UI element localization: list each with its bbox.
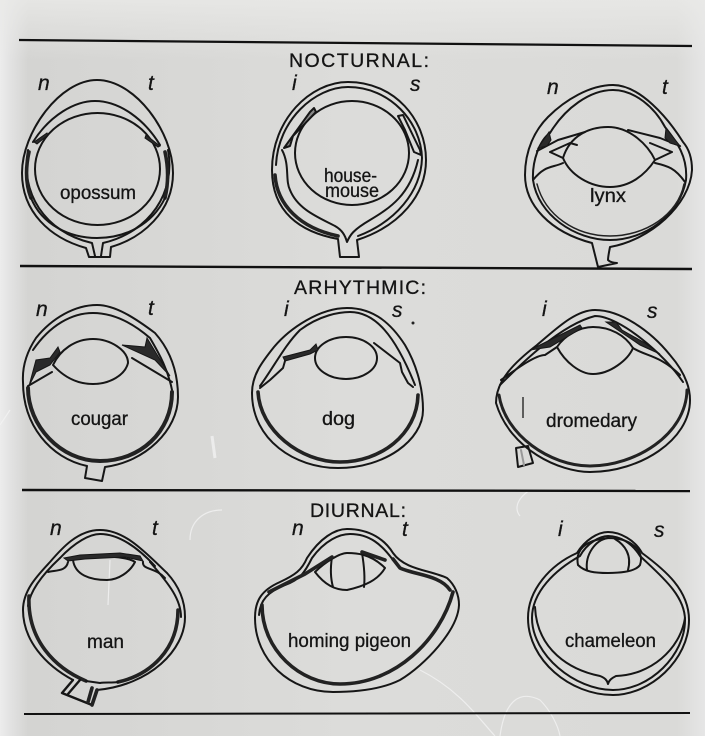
rule: nocturnal / arhythmic — [20, 266, 692, 269]
eye: opossum — [22, 72, 173, 257]
letter: n: n — [292, 517, 304, 540]
letter: i: i — [558, 518, 564, 541]
letter: n: n — [547, 76, 559, 99]
label: lynx: lynx — [590, 186, 627, 207]
heading: diurnal: DIURNAL: — [310, 500, 406, 522]
eye: man — [23, 517, 185, 705]
label: house-mouse: house- — [324, 166, 377, 187]
label: cougar: cougar — [71, 409, 129, 430]
eye: chameleon — [528, 518, 689, 695]
rule: top — [19, 40, 692, 46]
letter: s: s — [647, 300, 658, 323]
label: man: man — [87, 632, 124, 653]
rule: bottom — [24, 713, 690, 714]
letter: n: n — [36, 298, 48, 321]
heading: nocturnal: NOCTURNAL: — [289, 50, 429, 72]
letter: t: t — [148, 72, 155, 95]
letter: n: n — [38, 72, 50, 95]
letter: t: t — [662, 76, 669, 99]
label: dromedary: dromedary — [546, 411, 637, 432]
label: opossum: opossum — [60, 183, 136, 204]
eye: dromedary — [496, 298, 690, 472]
letter: i: i — [284, 298, 290, 321]
heading: arhythmic: ARHYTHMIC: — [294, 277, 426, 299]
eye: house-mouse: mouse — [325, 181, 379, 202]
letter: t: t — [148, 297, 155, 320]
eye: cougar — [23, 297, 178, 481]
letter: i: i — [542, 298, 548, 321]
letter: n: n — [50, 517, 62, 540]
letter: s: s — [410, 73, 421, 96]
label: chameleon: chameleon — [565, 631, 656, 652]
letter: t: t — [402, 518, 409, 541]
letter: i: i — [292, 72, 298, 95]
eye: lynx — [525, 76, 692, 267]
letter: s: s — [392, 299, 403, 322]
eye: house-mouse — [272, 72, 426, 257]
label: dog: dog — [322, 409, 355, 430]
letter: t: t — [152, 517, 159, 540]
letter: s: s — [654, 519, 665, 542]
rule: arhythmic / diurnal — [22, 490, 690, 491]
eye: dog — [252, 298, 423, 468]
eye: homing pigeon — [255, 517, 459, 692]
label: homing pigeon: homing pigeon — [288, 631, 411, 652]
